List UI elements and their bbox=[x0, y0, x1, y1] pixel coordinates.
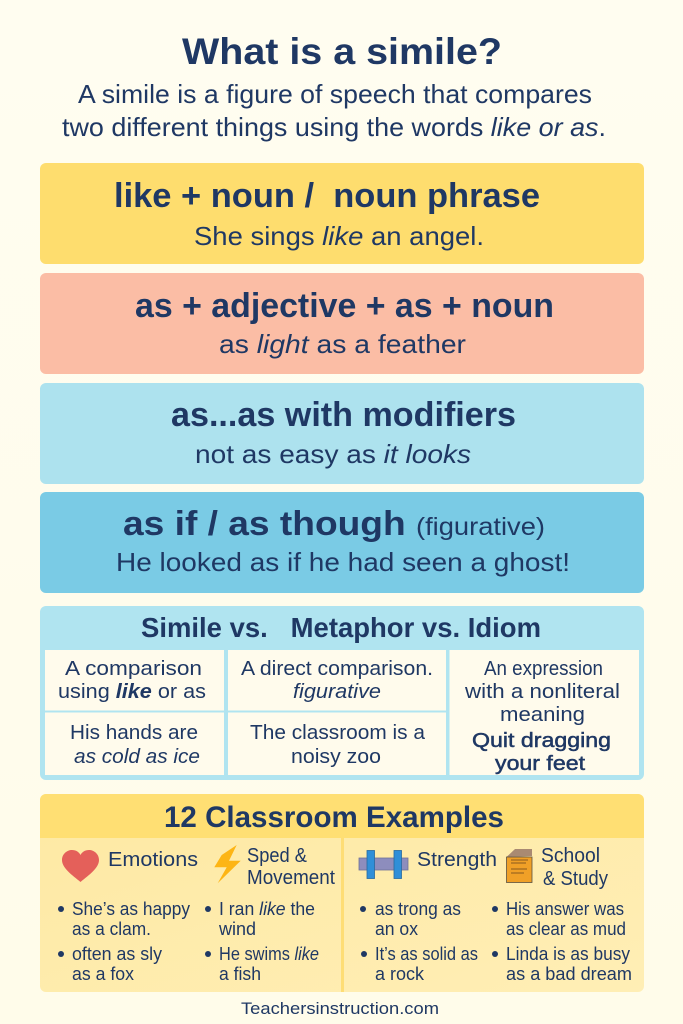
list: speed and movement: a fish bbox=[219, 964, 261, 984]
panel: as if as though bbox=[40, 492, 644, 593]
cell: simile definition bbox=[45, 650, 224, 710]
icon: book bbox=[506, 849, 532, 882]
list: speed and movement bbox=[205, 899, 319, 984]
icon: heart bbox=[62, 850, 99, 882]
cell: idiom: Quit dragging bbox=[472, 730, 611, 752]
intro text bbox=[62, 79, 606, 142]
list: strength: an ox bbox=[375, 919, 418, 939]
heading: speed and movement: Sped & bbox=[247, 845, 308, 867]
panel: 12 classroom examples bbox=[40, 794, 644, 992]
examples heading: 12 Classroom Examples bbox=[164, 801, 504, 834]
list: strength bbox=[360, 899, 478, 984]
list: strength: as trong as bbox=[375, 899, 461, 919]
list: emotions: as a clam. bbox=[72, 919, 151, 939]
icon: lightning bolt bbox=[214, 845, 241, 883]
list: emotions bbox=[58, 899, 190, 984]
panel: like + noun bbox=[40, 163, 644, 264]
footer: Teachersinstruction.com bbox=[241, 999, 439, 1018]
list: speed and movement: He swims like bbox=[219, 944, 319, 964]
heading: emotions: Emotions bbox=[108, 849, 198, 871]
intro text: A simile is a figure of speech that compares bbox=[78, 79, 592, 109]
cell: idiom: meaning bbox=[500, 704, 585, 726]
panel: as as with modifiers bbox=[40, 383, 644, 484]
list: speed and movement: wind bbox=[218, 919, 256, 939]
heading: speed and movement bbox=[247, 845, 335, 889]
list: school and study: Linda is as busy bbox=[506, 944, 630, 964]
cell: simile example: His hands are bbox=[70, 722, 198, 744]
panel: as adjective as noun bbox=[40, 273, 644, 374]
list: school and study: His answer was bbox=[506, 899, 624, 919]
list: school and study bbox=[492, 899, 632, 984]
list: emotions: She’s as happy bbox=[72, 899, 190, 919]
heading: school and study bbox=[541, 845, 608, 890]
heading: speed and movement: Movement bbox=[247, 867, 335, 889]
intro text: two different things using the words like or as. bbox=[62, 112, 606, 142]
cell: simile definition: using like or as bbox=[58, 681, 206, 703]
panel: as adjective as noun: as light as a feather bbox=[219, 329, 466, 359]
cell: simile example bbox=[45, 712, 224, 775]
list: strength: a rock bbox=[375, 964, 425, 984]
cell: metaphor example: noisy zoo bbox=[291, 746, 381, 768]
cell: simile example: as cold as ice bbox=[74, 746, 200, 768]
list: strength: It’s as solid as bbox=[375, 944, 478, 964]
comparison heading: Simile vs. Metaphor vs. Idiom bbox=[141, 612, 541, 643]
heading: school and study: & Study bbox=[543, 868, 608, 890]
panel: simile vs metaphor vs idiom bbox=[40, 606, 644, 780]
cell: metaphor example: The classroom is a bbox=[250, 722, 426, 744]
cell: idiom bbox=[450, 650, 639, 775]
list: emotions: as a fox bbox=[72, 964, 134, 984]
cell: simile definition: A comparison bbox=[65, 658, 202, 680]
list: emotions: often as sly bbox=[72, 944, 162, 964]
cell: metaphor definition: A direct comparison. bbox=[241, 658, 433, 680]
cell: idiom: your feet bbox=[495, 753, 586, 775]
panel: as as with modifiers: as...as with modifiers bbox=[171, 396, 516, 434]
icon: dumbbell bbox=[359, 850, 408, 878]
panel: like + noun: like + noun / noun phrase bbox=[114, 177, 540, 215]
heading: strength: Strength bbox=[417, 849, 497, 871]
list: school and study: as a bad dream bbox=[506, 964, 632, 984]
cell: metaphor definition: figurative bbox=[293, 681, 381, 703]
title: What is a simile? bbox=[182, 31, 502, 72]
list: school and study: as clear as mud bbox=[506, 919, 626, 939]
list: speed and movement: I ran like the bbox=[219, 899, 315, 919]
heading: school and study: School bbox=[541, 845, 600, 867]
panel: like + noun: She sings like an angel. bbox=[194, 221, 484, 251]
cell: idiom: with a nonliteral bbox=[464, 681, 620, 703]
cell: metaphor example bbox=[228, 712, 446, 775]
panel: as if as though: as if / as though (figurative) bbox=[123, 505, 545, 543]
cell: idiom: An expression bbox=[484, 658, 603, 680]
cell: metaphor definition bbox=[228, 650, 446, 710]
panel: as if as though: He looked as if he had seen a ghost! bbox=[116, 547, 570, 577]
panel: as adjective as noun: as + adjective + as + noun bbox=[135, 287, 554, 325]
panel: as as with modifiers: not as easy as it looks bbox=[195, 439, 471, 469]
